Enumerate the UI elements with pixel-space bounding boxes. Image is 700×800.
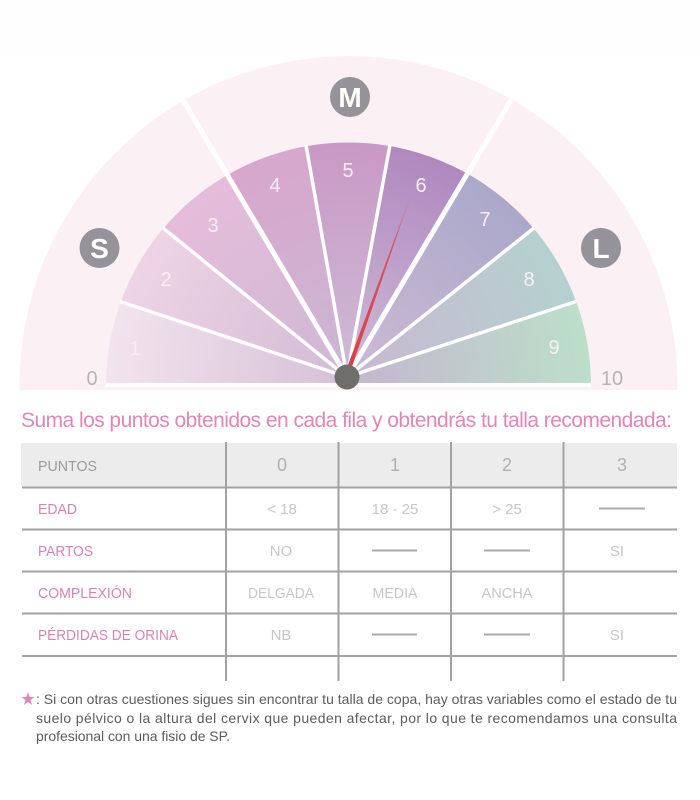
gauge sectors	[106, 142, 591, 383]
hub	[334, 364, 360, 390]
row labels: PÉRDIDAS DE ORINA	[38, 627, 178, 644]
table cell values: MEDIA	[372, 585, 418, 602]
scale end labels: 0	[86, 368, 98, 390]
badge S	[80, 228, 120, 268]
badge L	[581, 228, 621, 268]
table cell values: ANCHA	[482, 585, 532, 602]
table cell values: DELGADA	[248, 585, 314, 602]
sector numbers: 6	[415, 175, 427, 197]
header row: 0	[277, 455, 287, 475]
sector numbers: 8	[523, 269, 535, 291]
top background strip	[0, 0, 700, 53]
table grid	[22, 442, 677, 681]
table cell values: 18 - 25	[372, 501, 418, 518]
header row: 3	[617, 455, 627, 475]
table cell values: NO	[270, 543, 292, 560]
gauge	[20, 56, 678, 390]
row labels: EDAD	[38, 501, 77, 518]
sector numbers: 7	[479, 209, 491, 231]
scale end labels: 10	[601, 368, 623, 390]
table cell values: NB	[271, 627, 291, 644]
table cell values: < 18	[267, 501, 297, 518]
footnote text	[36, 691, 677, 744]
header row: 2	[502, 455, 512, 475]
footnote	[22, 691, 677, 744]
row labels: PARTOS	[38, 543, 93, 560]
table cell values: > 25	[492, 501, 522, 518]
footnote text: suelo pélvico o la altura del cervix que pueden afectar, por lo que te recomendamos una consulta	[36, 710, 677, 726]
badge L: L	[592, 233, 610, 264]
sector numbers: 1	[129, 338, 141, 360]
badge M	[330, 77, 370, 117]
outer size band	[20, 56, 678, 390]
header row: 1	[390, 455, 400, 475]
badge M: M	[338, 82, 362, 113]
footnote text: : Si con otras cuestiones sigues sin encontrar tu talla de copa, hay otras variables como el estado de tu	[36, 691, 677, 707]
sector numbers	[129, 160, 560, 360]
badge S: S	[90, 233, 109, 264]
header row	[38, 455, 627, 475]
table header background	[21, 443, 677, 487]
sector numbers: 3	[207, 215, 219, 237]
header row: PUNTOS	[38, 458, 97, 475]
sector numbers: 9	[548, 337, 560, 359]
table	[21, 442, 677, 681]
scale end labels	[86, 368, 623, 390]
table cell values: SI	[610, 627, 624, 644]
row labels: COMPLEXIÓN	[38, 585, 132, 602]
row labels	[38, 501, 178, 644]
sector numbers: 2	[160, 269, 172, 291]
table cell values	[248, 501, 624, 644]
table dashes	[372, 508, 645, 634]
sector dividers	[106, 100, 591, 385]
needle	[346, 192, 412, 371]
sector numbers: 5	[342, 160, 354, 182]
icon: star	[22, 692, 34, 705]
footnote text: profesional con una fisio de SP.	[36, 728, 230, 744]
table cell values: SI	[610, 543, 624, 560]
heading: Suma los puntos obtenidos en cada fila y obtendrás tu talla recomendada:	[21, 409, 672, 432]
sector numbers: 4	[269, 175, 281, 197]
